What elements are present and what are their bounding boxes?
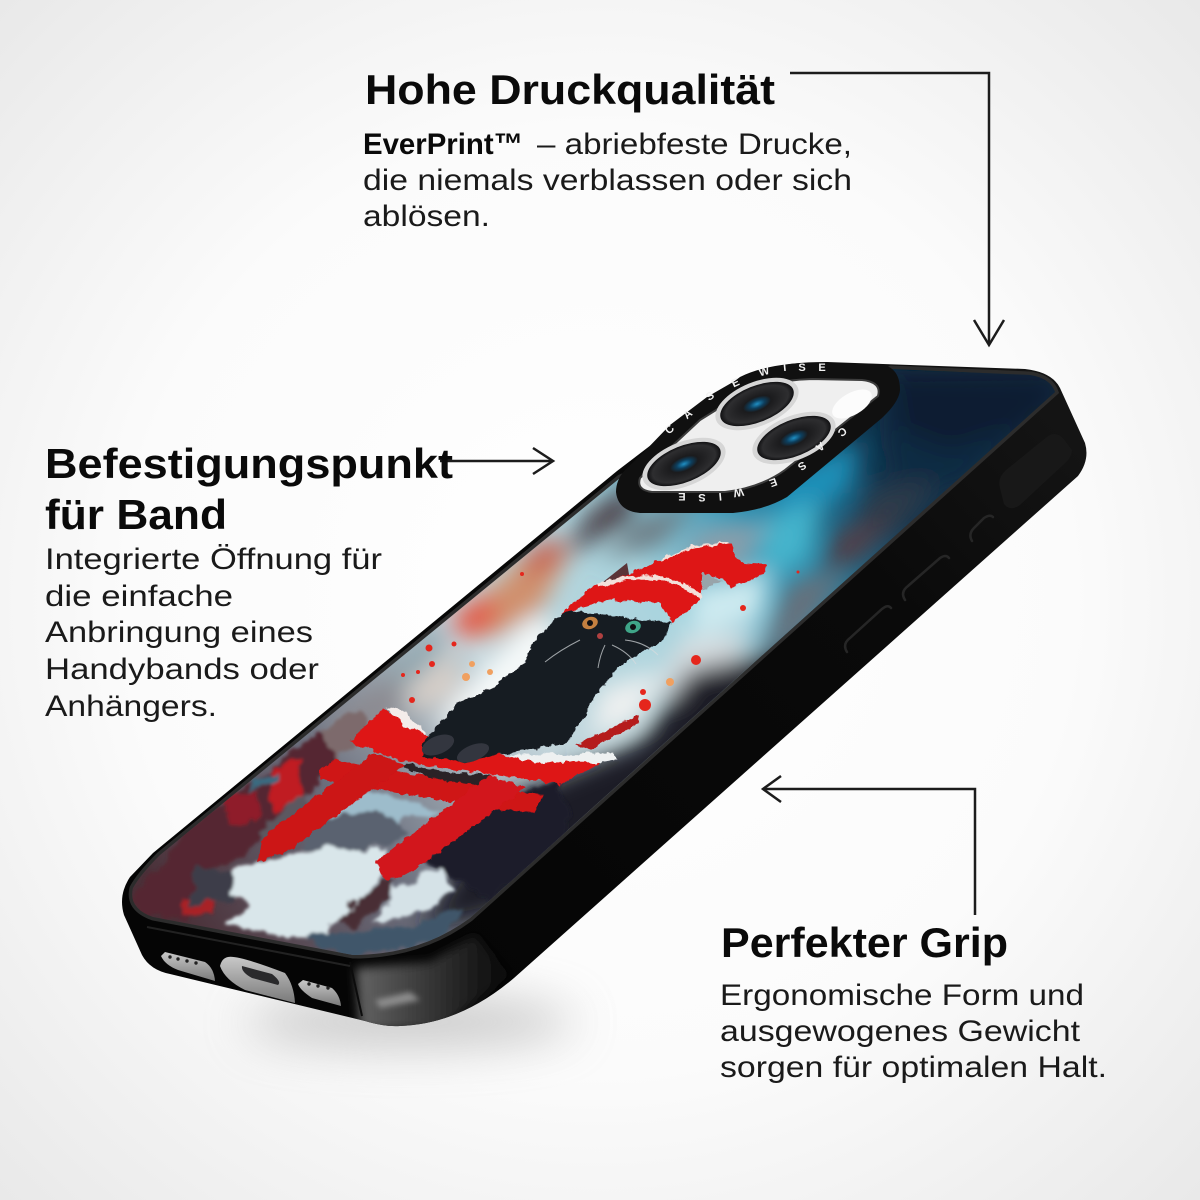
heading: für Band (45, 491, 227, 538)
brand ring bottom: E (768, 475, 779, 489)
brand ring bottom: E (678, 490, 686, 502)
description: Handybands oder (45, 653, 319, 686)
cat ear (603, 563, 630, 582)
glossy corner (350, 935, 510, 1030)
brand ring top (663, 362, 826, 437)
brush strokes (133, 705, 570, 958)
arrow: strap point (440, 448, 553, 474)
brand ring top: S (798, 362, 806, 374)
torii left leg (258, 752, 405, 862)
camera bezel (616, 363, 900, 513)
brand ring top: A (681, 408, 695, 422)
torii lower beam (320, 760, 543, 812)
santa hat (562, 543, 767, 623)
heading: Hohe Druckqualität (365, 66, 775, 113)
torii right leg (375, 775, 525, 880)
snow on beam (385, 706, 428, 735)
orange flecks (462, 661, 674, 686)
description (45, 543, 382, 723)
phone case (122, 362, 1086, 1030)
description: Anhängers. (45, 690, 217, 723)
lens left (635, 427, 733, 501)
torii dark gap (403, 762, 490, 786)
brand ring bottom: S (795, 458, 808, 472)
black cat (419, 563, 673, 767)
arrow: print quality (790, 73, 1004, 345)
charging port (220, 957, 295, 1003)
lens right (745, 401, 843, 475)
painted sky (330, 370, 1060, 930)
printed artwork (132, 369, 1055, 955)
cat nose (597, 633, 603, 639)
red splatter (401, 570, 800, 711)
cat eyes (582, 616, 641, 634)
brand ring top: I (783, 362, 787, 374)
lens top (708, 367, 806, 441)
text block: grip (720, 919, 1107, 1084)
brand ring top: E (730, 376, 742, 390)
side buttons (845, 516, 993, 652)
red strip right (575, 715, 640, 750)
camera glass (639, 379, 879, 492)
text block: print quality (363, 66, 852, 233)
description: die einfache (45, 580, 233, 613)
torii gate (258, 706, 640, 880)
description: die niemals verblassen oder sich (363, 164, 852, 197)
print rim (132, 369, 1055, 955)
description: Anbringung eines (45, 616, 313, 649)
speaker left (161, 952, 215, 981)
description (720, 979, 1107, 1084)
brand ring top: E (818, 362, 826, 374)
heading: Perfekter Grip (721, 919, 1008, 966)
grip detail (999, 434, 1072, 508)
brand ring bottom: S (698, 491, 706, 503)
brand ring top: S (704, 390, 717, 404)
heading (45, 440, 453, 538)
cat paws (422, 734, 489, 763)
torii top beam (350, 708, 600, 784)
camera module (616, 362, 900, 513)
description: Integrierte Öffnung für (45, 543, 382, 576)
bottom lip line (147, 927, 350, 966)
description (363, 128, 852, 233)
description: Ergonomische Form und (720, 979, 1084, 1012)
brand ring top: C (663, 423, 677, 437)
cat body (423, 610, 673, 762)
lower left maroon (133, 733, 345, 920)
arrow: grip (763, 776, 975, 915)
description: ausgewogenes Gewicht (720, 1015, 1081, 1048)
text block: strap point (45, 440, 453, 723)
brand ring bottom (678, 424, 849, 503)
brand ring bottom: I (718, 490, 722, 502)
cat whiskers (545, 640, 658, 668)
snow clouds (223, 847, 387, 936)
between legs (328, 790, 440, 826)
phone shadow (245, 998, 575, 1046)
description: ablösen. (363, 200, 490, 233)
case body (122, 362, 1086, 1026)
description: sorgen für optimalen Halt. (720, 1051, 1107, 1084)
brand ring bottom: C (835, 424, 849, 438)
brand ring bottom: W (732, 485, 745, 499)
brand ring top: W (758, 365, 771, 379)
speaker right (298, 980, 341, 1006)
brand ring bottom: A (813, 439, 827, 454)
description: – abriebfeste Drucke, (537, 128, 852, 161)
heading: Befestigungspunkt (45, 440, 453, 487)
description: EverPrint™ (363, 128, 523, 161)
flash (827, 383, 877, 425)
